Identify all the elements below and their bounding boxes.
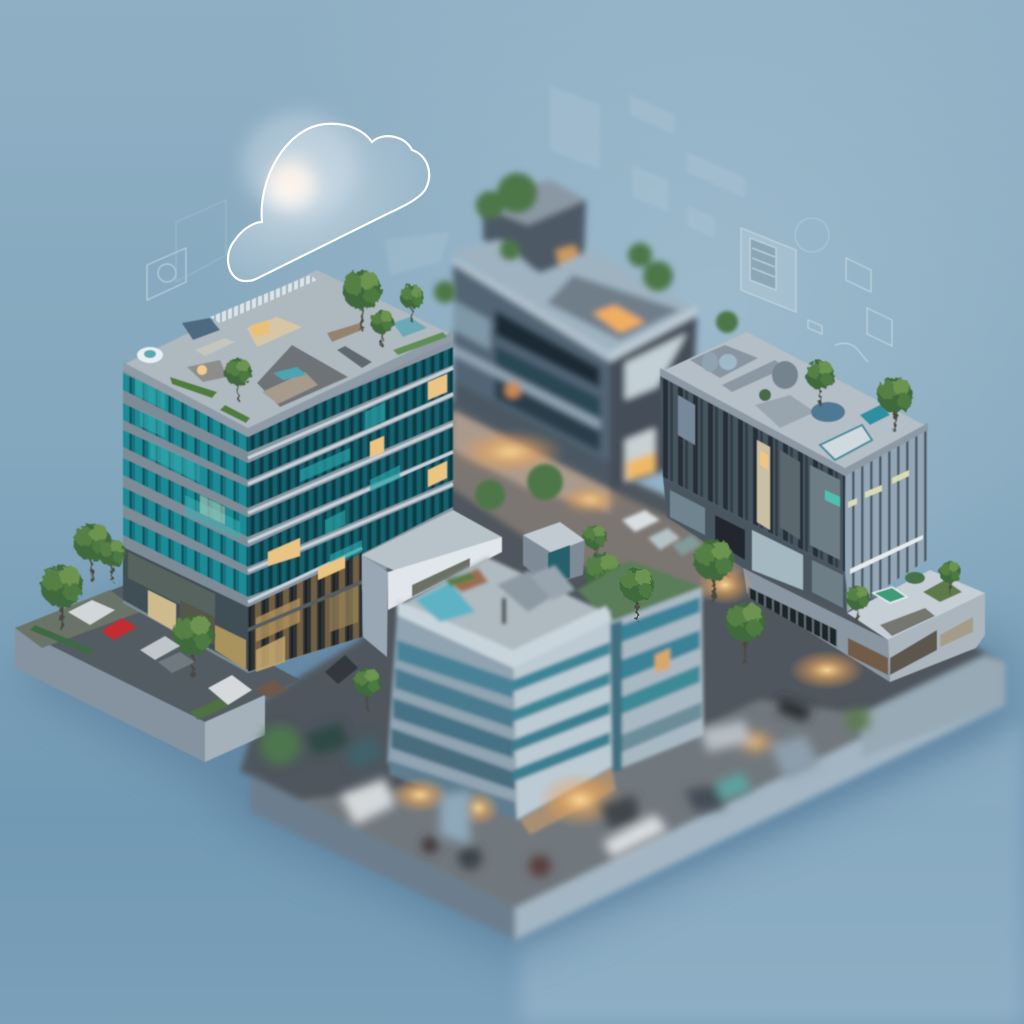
entrance glows — [520, 768, 616, 835]
rooftop trees — [224, 270, 424, 401]
front building left face — [387, 612, 517, 820]
cloud icon — [228, 113, 429, 281]
right podium terrace — [743, 561, 985, 682]
right building lit glass — [678, 395, 840, 560]
tower right face — [248, 335, 453, 673]
rooftop equipment — [690, 345, 890, 460]
back building ground lights — [452, 410, 610, 512]
left lot trees and cars — [41, 523, 358, 705]
hologram circle — [795, 218, 829, 252]
back building left face — [453, 257, 610, 487]
back roof courtyard — [547, 275, 680, 340]
terrace trees — [846, 561, 961, 623]
center trees — [353, 525, 765, 711]
front building right face — [513, 610, 612, 820]
annex green roof — [577, 560, 702, 622]
back trees — [434, 173, 673, 303]
tower roof — [123, 270, 453, 432]
hologram document panel — [741, 228, 796, 312]
rooftop lounge — [137, 317, 447, 423]
small grey building — [362, 510, 585, 657]
right building — [660, 332, 928, 612]
hologram small icons — [808, 258, 892, 362]
main ground platform — [240, 400, 1005, 940]
faint blurred back panels — [385, 85, 745, 275]
stair deck — [210, 275, 317, 323]
lit windows — [268, 374, 447, 580]
holographic panels — [147, 200, 892, 362]
back building roof — [453, 240, 697, 360]
shadow under city block — [10, 500, 1010, 960]
left ground platform — [15, 585, 300, 762]
right building roof — [660, 332, 928, 472]
foreground street and vehicles — [260, 697, 870, 877]
center street cars — [622, 510, 702, 556]
annex rooftop tree — [620, 568, 654, 621]
right building left face — [660, 372, 845, 572]
cars — [68, 600, 358, 705]
tower left face — [123, 365, 248, 673]
street glows — [697, 565, 865, 690]
front building roof — [400, 557, 600, 650]
podium left face — [743, 568, 890, 682]
side annex — [577, 560, 704, 772]
mid trees near back building — [475, 311, 738, 510]
small rooftop kiosk — [523, 522, 585, 585]
front building — [387, 557, 704, 835]
penthouse — [483, 180, 586, 273]
back building — [452, 180, 697, 514]
terrace deck — [847, 570, 985, 640]
trees — [41, 523, 213, 678]
back building floors — [453, 300, 610, 487]
podium right face — [888, 593, 985, 682]
left tower — [123, 270, 453, 673]
right building lower storey — [663, 477, 847, 612]
right rooftop trees — [806, 361, 913, 433]
back building right face — [610, 313, 697, 490]
hologram left icon — [147, 200, 226, 300]
right building right face — [845, 427, 928, 612]
